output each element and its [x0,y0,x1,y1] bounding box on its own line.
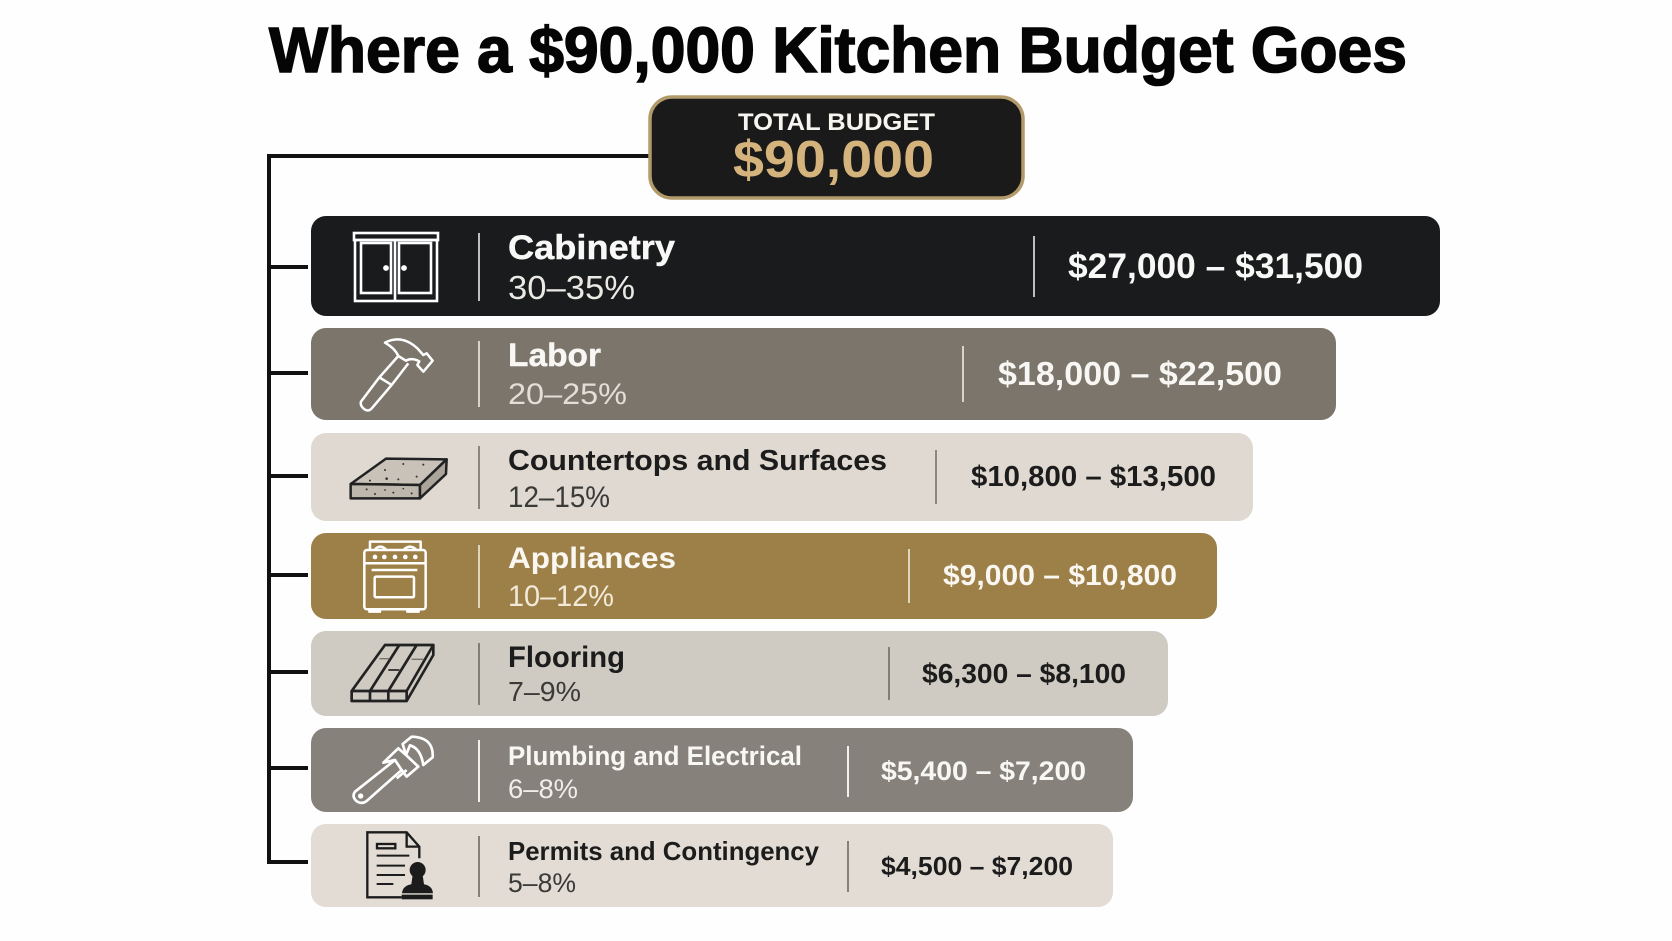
row: Appliances: Appliances [508,542,676,575]
row: Appliances: $9,000 – $10,800 [943,560,1177,592]
row: Labor [311,328,1336,420]
row: Cabinetry: $27,000 – $31,500 [1068,247,1363,286]
row: Countertops and Surfaces: $10,800 – $13,500 [971,461,1216,493]
row: Cabinetry: 30–35% [508,269,635,306]
row: Plumbing and Electrical [311,728,1133,812]
row: Cabinetry: Cabinetry [508,229,675,267]
row: Permits and Contingency: $4,500 – $7,200 [881,851,1073,881]
icon: countertop slab [351,459,447,498]
row: Countertops and Surfaces: Countertops and Surfaces [508,445,887,477]
connector lines [269,156,650,862]
row: Appliances: 10–12% [508,580,614,613]
row: Flooring: Flooring [508,641,625,674]
icon: flooring planks [352,645,433,701]
total budget box [650,97,1023,198]
row: Permits and Contingency: 5–8% [508,868,576,898]
icon: oven [364,542,426,612]
row: Countertops and Surfaces: 12–15% [508,481,610,514]
row: Flooring: $6,300 – $8,100 [922,658,1126,689]
row: Plumbing and Electrical: $5,400 – $7,200 [881,756,1086,786]
row: Labor: $18,000 – $22,500 [998,355,1282,392]
icon: cabinet [354,233,438,301]
row: Flooring: 7–9% [508,676,581,707]
row: Permits and Contingency [311,824,1113,907]
total budget box: TOTAL BUDGET [738,109,935,136]
icon: pipe wrench [354,737,433,803]
icon: hammer [361,339,433,410]
row: Countertops and Surfaces [311,433,1253,521]
icon: permit document and stamp [367,832,433,899]
row: Plumbing and Electrical: 6–8% [508,774,578,804]
title: Where a $90,000 Kitchen Budget Goes [269,14,1407,86]
row: Appliances [311,533,1217,619]
row: Flooring [311,631,1168,716]
row: Plumbing and Electrical: Plumbing and Electrical [508,741,802,771]
row: Labor: 20–25% [508,378,627,411]
total budget box: $90,000 [733,131,934,189]
row: Cabinetry [311,216,1440,316]
row: Labor: Labor [508,337,601,373]
row: Permits and Contingency: Permits and Contingency [508,836,820,866]
